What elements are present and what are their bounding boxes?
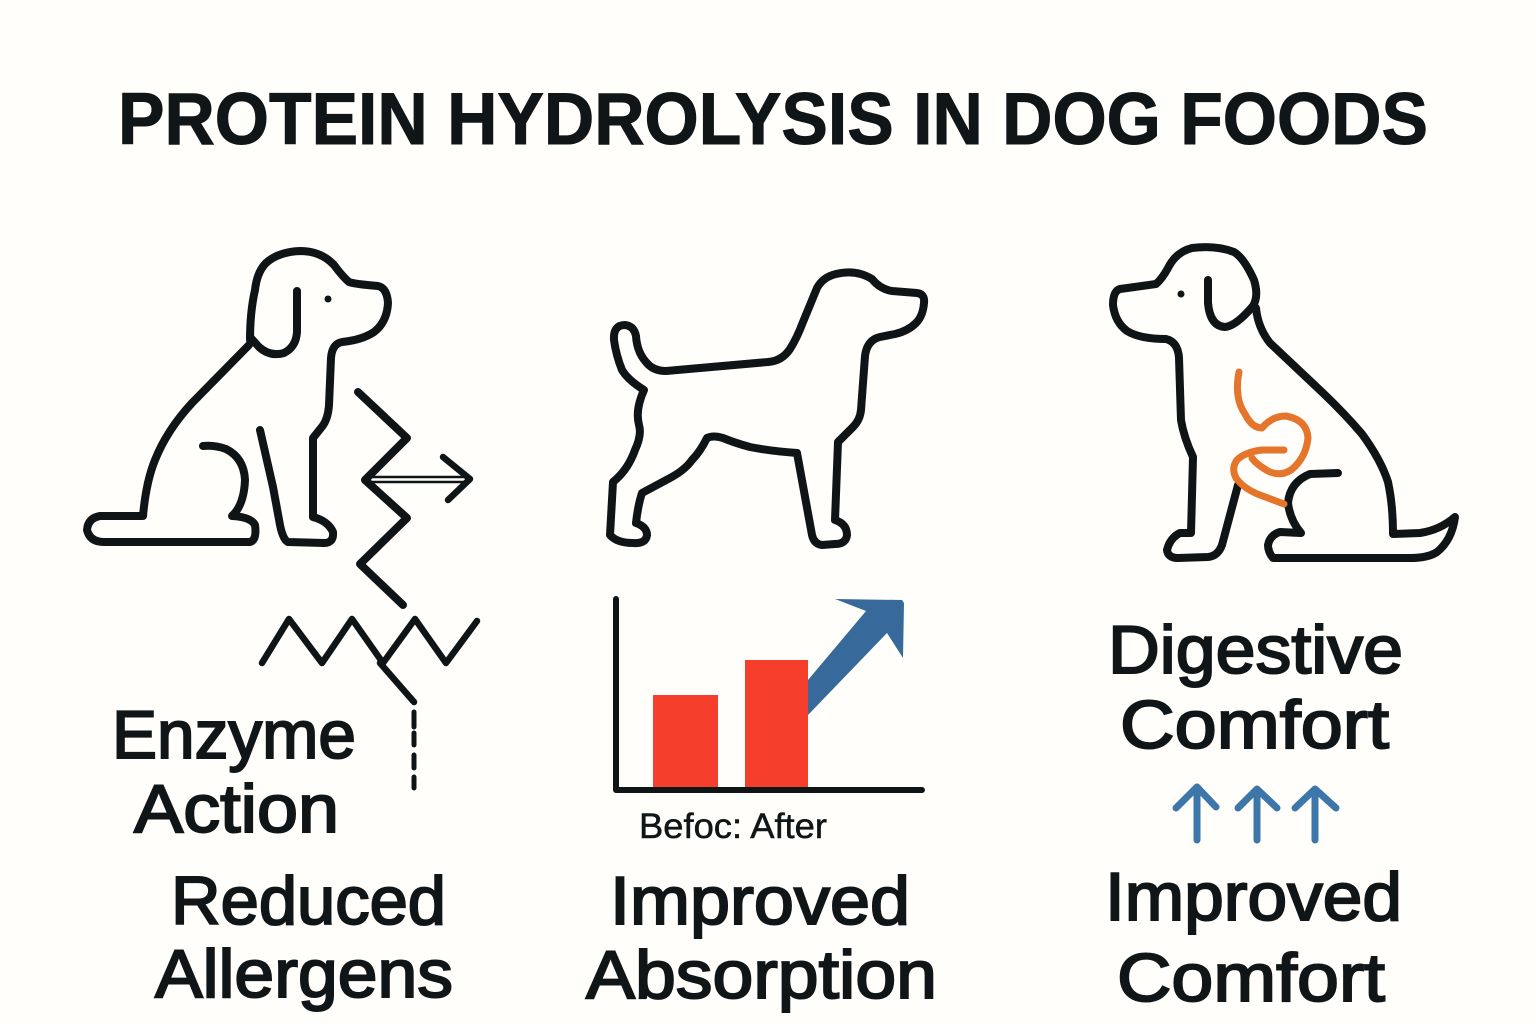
label: digestive comfort: Digestive: [1108, 612, 1403, 688]
label: enzyme action: Enzyme: [112, 697, 356, 773]
label: improved comfort: Comfort: [1117, 940, 1385, 1016]
label: enzyme action: Action: [134, 771, 339, 847]
icon: three up arrows: [1176, 787, 1336, 840]
icon: standing dog: [610, 272, 924, 545]
label: digestive comfort: [1108, 612, 1403, 763]
label: reduced allergens: Allergens: [155, 936, 453, 1012]
icon: dog eye: [324, 296, 332, 302]
label: improved absorption: [586, 863, 937, 1013]
panel: improved absorption: [586, 272, 937, 1013]
label: improved absorption: Absorption: [586, 937, 937, 1013]
icon: sitting dog facing right: [87, 251, 388, 543]
icon: sitting dog facing left: [1113, 247, 1455, 558]
icon: dog eye: [1178, 290, 1184, 298]
chart labels: Befoc: After: [639, 807, 827, 846]
title: PROTEIN HYDROLYSIS IN DOG FOODS: [118, 79, 1428, 160]
label: improved absorption: Improved: [610, 863, 910, 939]
label: reduced allergens: Reduced: [171, 863, 446, 939]
icon: orange intestine: [1234, 372, 1308, 504]
label: enzyme action: [112, 697, 356, 847]
bar: before: [653, 695, 718, 788]
icon: enzyme cutting chain: [262, 392, 477, 788]
bar chart: before and after: [616, 599, 922, 846]
label: improved comfort: [1105, 859, 1402, 1016]
label: improved comfort: Improved: [1105, 859, 1402, 935]
bar: after: [745, 660, 808, 788]
panel: digestive comfort: [1105, 247, 1455, 1016]
panel: reduced allergens: [87, 251, 477, 1012]
label: reduced allergens: [155, 863, 453, 1012]
label: digestive comfort: Comfort: [1120, 687, 1389, 763]
chart axes: [616, 599, 922, 790]
chart arrow: [808, 599, 904, 715]
